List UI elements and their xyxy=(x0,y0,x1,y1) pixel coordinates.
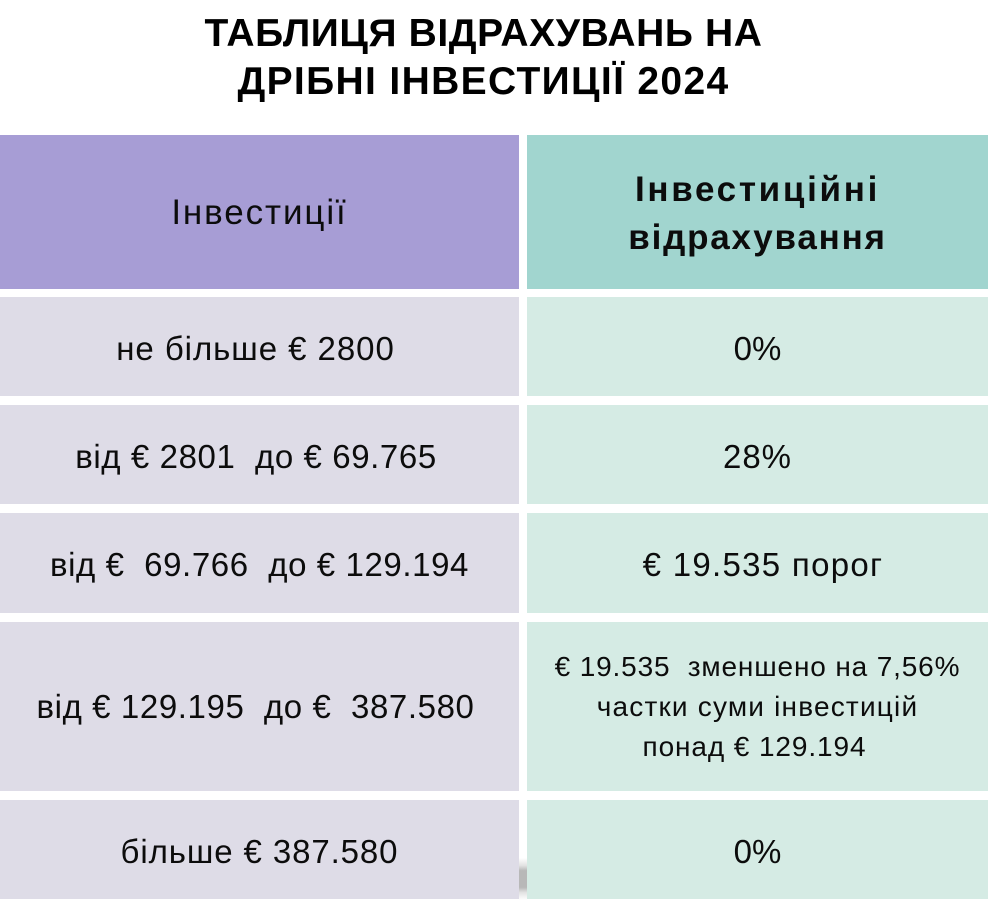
table header: investments xyxy=(0,135,519,289)
row 5 investments: більше € 387.580 xyxy=(121,832,398,870)
title xyxy=(204,12,763,103)
row 2 deduction: 28% xyxy=(723,438,792,474)
row 3 investments xyxy=(0,513,519,613)
row 3 deduction: € 19.535 порог xyxy=(643,546,883,583)
row 5 deduction: 0% xyxy=(734,832,781,870)
row 1 deduction: 0% xyxy=(734,330,781,366)
table header: investment deductions: Інвестиційні xyxy=(635,170,880,209)
row 4 deduction: € 19.535 зменшено на 7,56% xyxy=(555,650,960,682)
title: ТАБЛИЦЯ ВІДРАХУВАНЬ НА xyxy=(204,12,763,55)
table header: investments: Інвестиції xyxy=(171,193,348,232)
row 5 deduction xyxy=(527,800,988,899)
row 3 deduction xyxy=(527,513,988,613)
table header: investment deductions: відрахування xyxy=(628,218,887,257)
scan artefact between columns xyxy=(519,858,527,900)
row 1 deduction xyxy=(527,297,988,396)
row 4 deduction: понад € 129.194 xyxy=(643,730,866,762)
row 1 investments: не більше € 2800 xyxy=(116,330,395,366)
row 5 investments xyxy=(0,800,519,899)
row 3 investments: від € 69.766 до € 129.194 xyxy=(50,546,469,583)
title: ДРІБНІ ІНВЕСТИЦІЇ 2024 xyxy=(237,60,730,103)
row 4 deduction: частки суми інвестицій xyxy=(597,690,918,722)
row 2 deduction xyxy=(527,405,988,504)
row 1 investments xyxy=(0,297,519,396)
row 4 investments: від € 129.195 до € 387.580 xyxy=(36,688,474,724)
row 2 investments xyxy=(0,405,519,504)
table header: investment deductions xyxy=(527,135,988,289)
row 4 investments xyxy=(0,622,519,791)
row 4 deduction xyxy=(527,622,988,791)
row 2 investments: від € 2801 до € 69.765 xyxy=(75,438,437,474)
